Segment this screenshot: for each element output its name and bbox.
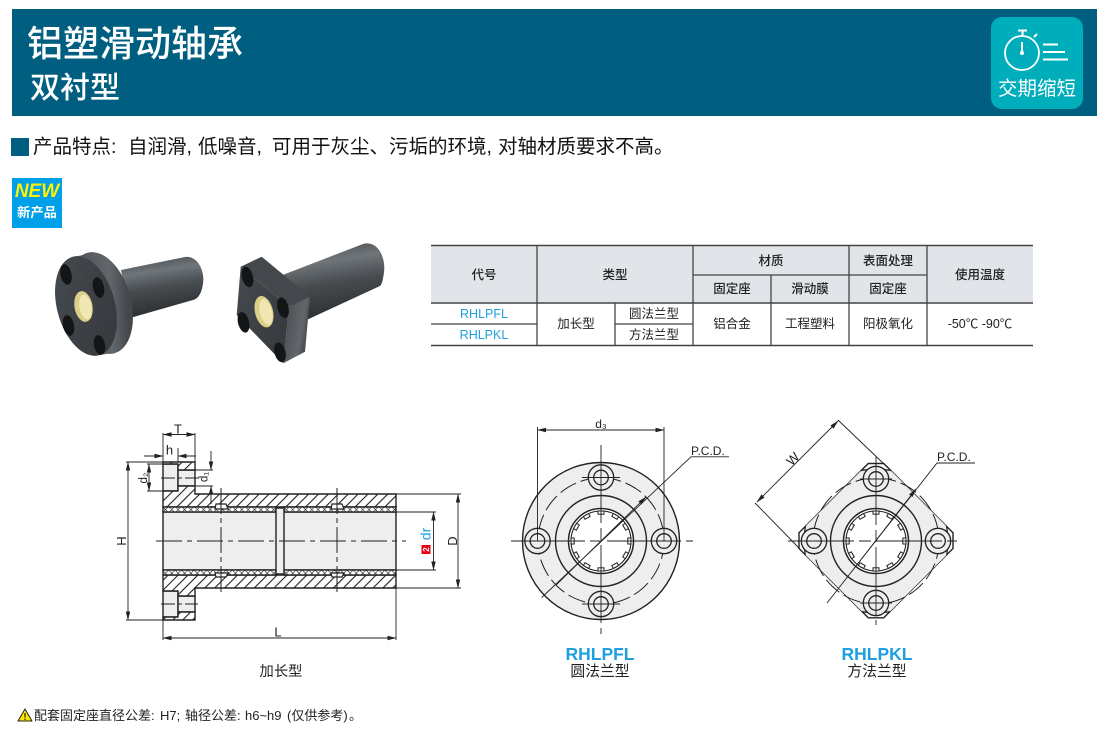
title: 铝塑滑动轴承 bbox=[27, 23, 243, 64]
dr label with tolerance tag bbox=[418, 527, 434, 554]
center lines bbox=[156, 478, 406, 604]
subtitle: 双衬型 bbox=[30, 72, 120, 105]
specification table: 表面处理 bbox=[863, 253, 913, 268]
center gap bbox=[276, 508, 284, 574]
drawings and table layer bbox=[18, 243, 1033, 722]
header banner bbox=[12, 9, 1097, 116]
P.C.D. label: P.C.D. bbox=[691, 444, 725, 458]
badge text 新产品: 新产品 bbox=[17, 205, 57, 220]
bearing liner bbox=[163, 507, 396, 575]
footnote: h6~h9 bbox=[245, 708, 282, 723]
caption: RHLPKL bbox=[842, 644, 913, 680]
dr label with tolerance tag: 2 bbox=[422, 547, 431, 552]
center lines bbox=[788, 457, 957, 625]
P.C.D. label: P.C.D. bbox=[937, 450, 971, 464]
dimension labels: d₂ bbox=[138, 473, 150, 483]
bore and holes bbox=[163, 464, 396, 617]
product photo: square flange bearing bbox=[236, 243, 384, 363]
specification table: 方法兰型 bbox=[629, 327, 679, 342]
caption: RHLPKL: RHLPKL bbox=[842, 644, 913, 664]
dimension labels: L bbox=[274, 624, 282, 640]
mounting holes bbox=[525, 465, 677, 617]
footnote: (仅供参考) bbox=[287, 708, 348, 723]
caption: RHLPFL: 圆法兰型 bbox=[570, 663, 630, 680]
P.C.D. leader bbox=[827, 463, 975, 603]
dimension labels bbox=[114, 422, 460, 640]
specification table: 固定座 bbox=[713, 281, 751, 296]
front view: round flange RHLPFL bbox=[511, 417, 729, 634]
icon: stopwatch bbox=[1004, 30, 1068, 71]
footnote: H7; bbox=[160, 708, 180, 723]
feature line marker bbox=[11, 138, 29, 156]
specification table: RHLPKL bbox=[460, 328, 508, 342]
badge label: 交期缩短 bbox=[998, 78, 1076, 100]
dimension labels: T bbox=[174, 422, 182, 436]
caption: extended type: 加长型 bbox=[260, 663, 302, 680]
specification table: 固定座 bbox=[869, 281, 907, 296]
dimension labels: d₁ bbox=[198, 472, 210, 482]
icon: warning triangle bbox=[18, 709, 32, 721]
front view: square flange RHLPKL bbox=[755, 420, 975, 625]
badge: shorter lead time bbox=[991, 17, 1083, 109]
dimension labels: H bbox=[114, 536, 129, 546]
specification table: 滑动膜 bbox=[791, 281, 829, 296]
product photo: round flange bearing bbox=[45, 245, 203, 363]
caption: RHLPKL: 方法兰型 bbox=[847, 663, 907, 680]
dr label with tolerance tag: dr bbox=[418, 527, 434, 540]
dimension lines bbox=[126, 433, 461, 640]
specification table bbox=[431, 245, 1033, 346]
center lines bbox=[511, 445, 693, 634]
specification table: 工程塑料 bbox=[785, 316, 835, 331]
retaining grooves bbox=[215, 504, 344, 577]
specification table: 加长型 bbox=[557, 317, 595, 331]
specification table: RHLPFL bbox=[460, 307, 508, 321]
feature description: 自润滑, bbox=[128, 136, 192, 158]
feature description: 低噪音, bbox=[198, 136, 262, 158]
feature description: 对轴材质要求不高。 bbox=[498, 136, 674, 158]
footnote: 配套固定座直径公差: bbox=[34, 708, 155, 723]
specification table: 材质 bbox=[758, 254, 784, 268]
d3 label: d₃ bbox=[595, 417, 607, 431]
section drawing: extended type bbox=[114, 422, 461, 640]
new product badge bbox=[12, 178, 62, 228]
caption: RHLPFL bbox=[565, 644, 635, 680]
specification table: 圆法兰型 bbox=[629, 307, 679, 321]
dimension labels: h bbox=[166, 442, 173, 458]
specification table: 阳极氧化 bbox=[863, 317, 913, 331]
caption: RHLPFL: RHLPFL bbox=[565, 644, 635, 664]
feature description: 可用于灰尘、污垢的环境, bbox=[272, 136, 492, 158]
W label: W bbox=[783, 449, 803, 468]
footnote: 。 bbox=[349, 708, 362, 723]
specification table: 使用温度 bbox=[955, 267, 1005, 282]
feature description: 产品特点: bbox=[33, 136, 116, 158]
badge text NEW: NEW bbox=[15, 181, 59, 202]
spline teeth bbox=[571, 511, 631, 571]
specification table: 铝合金 bbox=[713, 316, 751, 331]
P.C.D. leader bbox=[542, 457, 729, 598]
spline teeth bbox=[846, 511, 906, 571]
specification table: 代号 bbox=[471, 268, 497, 282]
W dimension bbox=[755, 420, 884, 549]
d3 dimension bbox=[538, 427, 664, 541]
specification table: 类型 bbox=[602, 268, 628, 282]
feature description bbox=[33, 136, 674, 158]
mounting holes bbox=[801, 466, 951, 616]
footnote: 轴径公差: bbox=[185, 708, 241, 723]
specification table: -50℃ -90℃ bbox=[948, 317, 1012, 331]
hatched body bbox=[163, 462, 396, 620]
dimension labels: D bbox=[445, 536, 460, 546]
